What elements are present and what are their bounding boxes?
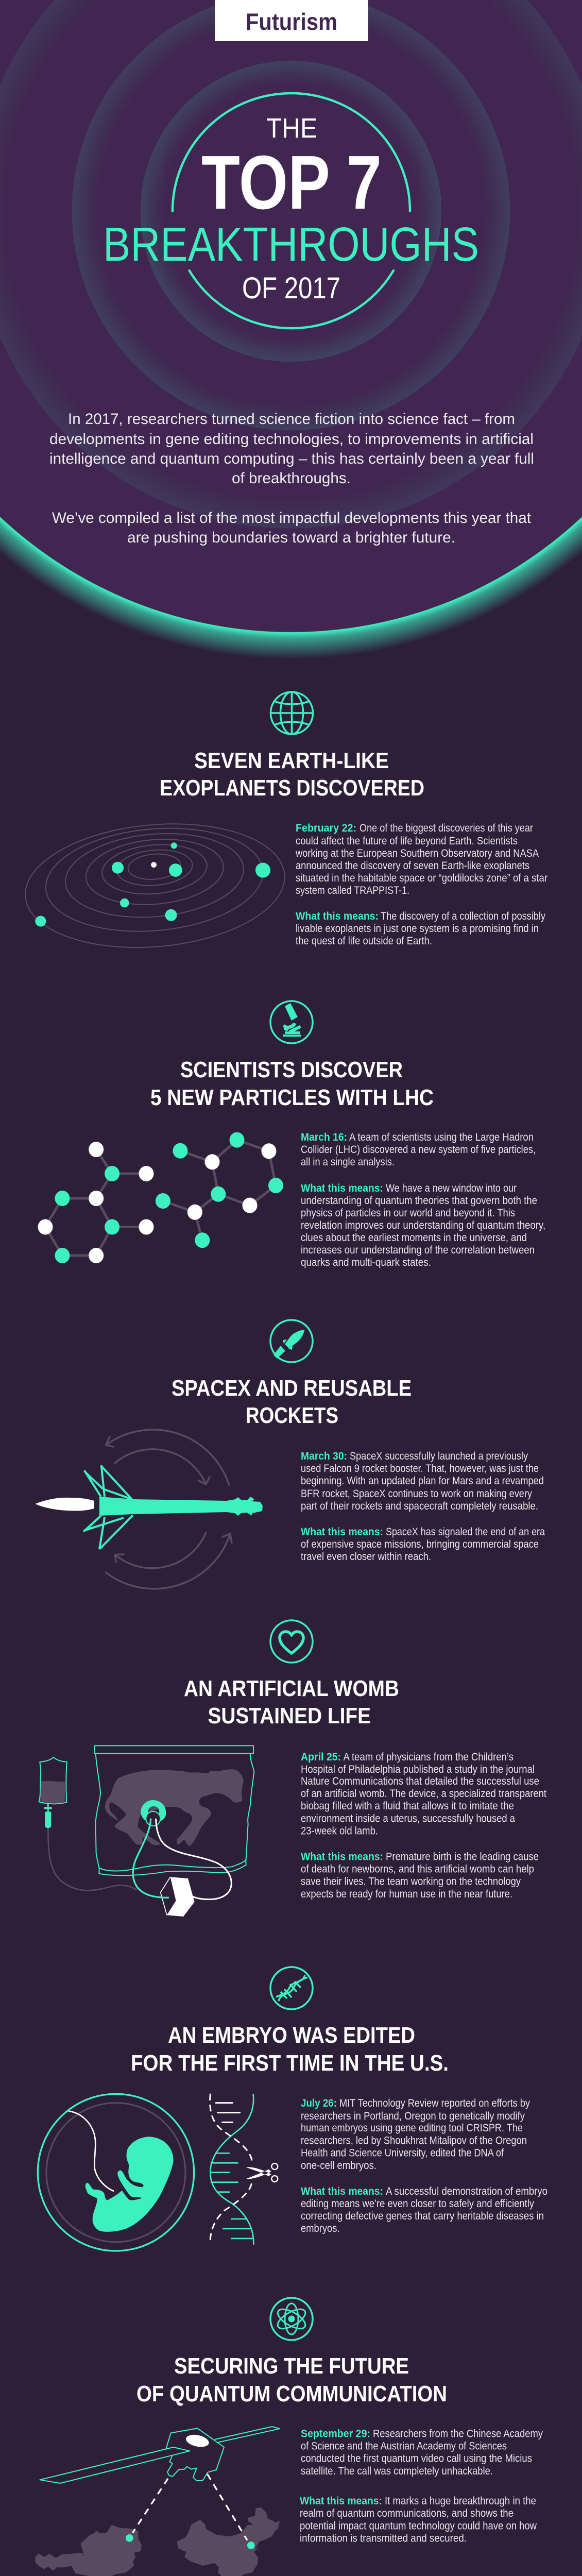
- text: February 22: February 22:: [296, 822, 356, 834]
- intro text: developments in gene editing technologies, to improvements in artificial: [49, 431, 534, 448]
- diagram: embryo and cut DNA: [38, 2094, 278, 2251]
- text: April 25: Premature birth is the leading cause: [386, 1851, 539, 1863]
- heading: FOR THE FIRST TIME IN THE U.S.: [131, 2050, 449, 2076]
- text: March 30: of expensive space missions, bringing commercial space: [301, 1538, 539, 1550]
- title: THE: [266, 113, 317, 144]
- text: September 29: What this means:: [300, 2495, 382, 2507]
- intro text: of breakthroughs.: [232, 470, 351, 487]
- text: July 26: A successful demonstration of embryo: [386, 2185, 547, 2197]
- text: July 26: one-cell embryos.: [301, 2160, 376, 2172]
- heading: AN EMBRYO WAS EDITED: [168, 2023, 415, 2048]
- heading: SECURING THE FUTURE: [174, 2353, 409, 2379]
- text: July 26: Health and Science University, edited the DNA of: [301, 2147, 504, 2159]
- title ring arcs: [173, 93, 410, 328]
- heading: ROCKETS: [246, 1403, 338, 1428]
- icon: atom: [270, 2298, 313, 2340]
- text: March 30: SpaceX has signaled the end of an era: [386, 1526, 545, 1538]
- text: April 25: Nature Communications that detailed the successful use: [301, 1775, 539, 1787]
- text: April 25: of death for newborns, and this artificial womb can help: [301, 1863, 534, 1875]
- text: March 16: increases our understanding of the correlation between: [301, 1244, 535, 1256]
- title: TOP 7: [201, 140, 382, 225]
- text: February 22: One of the biggest discoveries of this year: [360, 822, 533, 834]
- text: July 26: MIT Technology Review reported on efforts by: [339, 2097, 530, 2109]
- text: March 16: quarks and multi-quark states.: [301, 1257, 431, 1268]
- diagram: particle molecules: [38, 1132, 283, 1263]
- text: February 22: livable exoplanets in just one system is a promising find in: [296, 923, 539, 935]
- text: July 26: editing means we’re even closer to safely and efficiently: [301, 2198, 534, 2210]
- heading: [184, 1676, 399, 1728]
- panel: an artificial womb: [39, 1620, 546, 1917]
- text: September 29: satellite. The call was completely unhackable.: [301, 2465, 493, 2477]
- text: February 22: [295, 822, 547, 947]
- heading: [131, 2023, 449, 2076]
- heading: [172, 1376, 412, 1428]
- text: July 26: correcting defective genes that carry heritable diseases in: [301, 2210, 544, 2222]
- text: July 26: What this means:: [301, 2185, 383, 2197]
- text: July 26: [301, 2097, 547, 2234]
- title: OF 2017: [242, 272, 340, 305]
- text: March 30: BFR rocket, SpaceX continues to work on making every: [301, 1488, 532, 1500]
- text: July 26: researchers, led by Shoukhrat Mitalipov of the Oregon: [301, 2135, 527, 2146]
- text: March 30: used Falcon 9 rocket booster. That, however, was just the: [301, 1463, 539, 1475]
- diagram: artificial womb biobag: [39, 1745, 254, 1917]
- title: BREAKTHROUGHS: [103, 217, 479, 271]
- heading: EXOPLANETS DISCOVERED: [160, 775, 424, 801]
- text: September 29: [300, 2428, 543, 2544]
- text: March 30: What this means:: [301, 1526, 383, 1538]
- icon: DNA helix: [270, 1967, 313, 2009]
- panel: SpaceX and reusable rockets: [35, 1320, 545, 1589]
- diagram: satellite linking Austria and China: [35, 2427, 280, 2576]
- heading: [160, 748, 424, 801]
- hero purple dome with teal glow: [0, 0, 582, 685]
- text: April 25: What this means:: [301, 1851, 383, 1863]
- intro text: We’ve compiled a list of the most impactful developments this year that: [52, 510, 532, 527]
- text: March 30: March 30:: [301, 1450, 347, 1462]
- text: April 25: Hospital of Philadelphia published a study in the journal: [301, 1764, 535, 1775]
- text: March 16: physics of particles in our world and beyond it. This: [301, 1207, 515, 1219]
- logo: Futurism: Futurism: [246, 8, 337, 35]
- heading: [150, 1057, 434, 1110]
- icon: rocket: [270, 1320, 313, 1362]
- text: March 30: SpaceX successfully launched a previously: [350, 1450, 528, 1462]
- title: [103, 113, 479, 305]
- text: July 26: researchers in Portland, Oregon to genetically modify: [301, 2110, 525, 2122]
- text: March 16: all in a single analysis.: [301, 1156, 395, 1168]
- text: July 26: July 26:: [301, 2097, 337, 2109]
- heading: SEVEN EARTH-LIKE: [194, 748, 389, 773]
- heading: SPACEX AND REUSABLE: [172, 1376, 412, 1401]
- text: July 26: embryos.: [301, 2223, 340, 2234]
- text: April 25: 23-week old lamb.: [301, 1825, 378, 1837]
- text: March 30: part of their rockets and spacecraft completely reusable.: [301, 1500, 538, 1512]
- heading: AN ARTIFICIAL WOMB: [184, 1676, 399, 1701]
- text: February 22: system called TRAPPIST-1.: [296, 885, 409, 896]
- text: September 29: of Science and the Austrian Academy of Sciences: [301, 2440, 507, 2452]
- panel: 5 new particles with LHC: [38, 1001, 545, 1268]
- text: September 29: It marks a huge breakthrough in the: [385, 2495, 536, 2507]
- text: March 16: clues about the earliest moments in the universe, and: [301, 1232, 527, 1244]
- text: March 16: revelation improves our understanding of quantum theory,: [301, 1219, 545, 1231]
- panel: embryo edited: [38, 1967, 547, 2251]
- text: September 29: Researchers from the Chinese Academy: [373, 2428, 543, 2440]
- text: July 26: human embryos using gene editing tool CRISPR. The: [301, 2122, 523, 2134]
- heading: SCIENTISTS DISCOVER: [180, 1057, 403, 1082]
- intro text: intelligence and quantum computing – this has certainly been a year full: [49, 450, 534, 467]
- panel: seven earth-like exoplanets: [20, 692, 547, 958]
- text: September 29: realm of quantum communications, and shows the: [300, 2507, 513, 2519]
- heading: 5 NEW PARTICLES WITH LHC: [150, 1085, 434, 1110]
- text: September 29: September 29:: [301, 2428, 370, 2440]
- icon: globe: [271, 692, 313, 734]
- panel: quantum communication: [35, 2298, 543, 2576]
- text: March 16: understanding of quantum theories that govern both the: [301, 1195, 537, 1207]
- text: March 16: A team of scientists using the Large Hadron: [349, 1131, 534, 1143]
- text: April 25: [301, 1751, 546, 1900]
- text: March 30: [301, 1450, 545, 1563]
- text: March 16: We have a new window into our: [386, 1182, 517, 1194]
- text: April 25: expects be ready for human use in the near future.: [301, 1888, 512, 1900]
- heading: [136, 2353, 447, 2406]
- text: February 22: situated in the habitable space or “goldilocks zone” of a star: [296, 872, 547, 884]
- text: April 25: A team of physicians from the Children’s: [343, 1751, 513, 1763]
- text: April 25: of an artificial womb. The device, a specialized transparent: [301, 1788, 546, 1800]
- heading: OF QUANTUM COMMUNICATION: [136, 2381, 447, 2406]
- text: March 16: [301, 1131, 545, 1268]
- text: February 22: announced the discovery of seven Earth-like exoplanets: [296, 860, 529, 872]
- text: September 29: information is transmitted and secured.: [300, 2533, 467, 2544]
- text: September 29: conducted the first quantum video call using the Micius: [301, 2452, 532, 2465]
- hero panel: [0, 0, 582, 685]
- intro text: [49, 411, 534, 546]
- text: April 25: April 25:: [301, 1751, 341, 1763]
- text: March 16: March 16:: [301, 1131, 347, 1143]
- text: March 30: beginning. With an updated plan for Mars and a revamped: [301, 1475, 544, 1487]
- text: April 25: environment inside a uterus, successfully housed a: [301, 1812, 515, 1825]
- heading: SUSTAINED LIFE: [208, 1703, 371, 1728]
- text: February 22: the quest of life outside of Earth.: [296, 935, 432, 947]
- text: February 22: working at the European Southern Observatory and NASA: [295, 848, 539, 859]
- text: September 29: potential impact quantum technology could have on how: [300, 2520, 537, 2532]
- diagram: reusable rocket with arrows: [35, 1430, 263, 1589]
- intro text: In 2017, researchers turned science fiction into science fact – from: [68, 411, 515, 428]
- text: March 16: Collider (LHC) discovered a new system of five particles,: [301, 1144, 536, 1156]
- icon: heart: [270, 1620, 313, 1663]
- logo: Futurism: [215, 0, 368, 41]
- icon: microscope: [270, 1001, 313, 1043]
- text: April 25: save their lives. The team working on the technology: [301, 1875, 521, 1888]
- intro text: are pushing boundaries toward a brighter future.: [127, 529, 455, 546]
- concentric rings: [0, 0, 582, 531]
- text: April 25: biobag filled with a fluid that allows it to imitate the: [301, 1800, 514, 1812]
- text: February 22: What this means:: [296, 910, 379, 922]
- text: March 16: What this means:: [301, 1182, 383, 1194]
- text: February 22: The discovery of a collection of possibly: [381, 910, 545, 922]
- text: March 30: travel even closer within reach.: [301, 1551, 431, 1563]
- text: February 22: could affect the future of life beyond Earth. Scientists: [296, 835, 518, 847]
- diagram: planetary orbits: [20, 814, 290, 958]
